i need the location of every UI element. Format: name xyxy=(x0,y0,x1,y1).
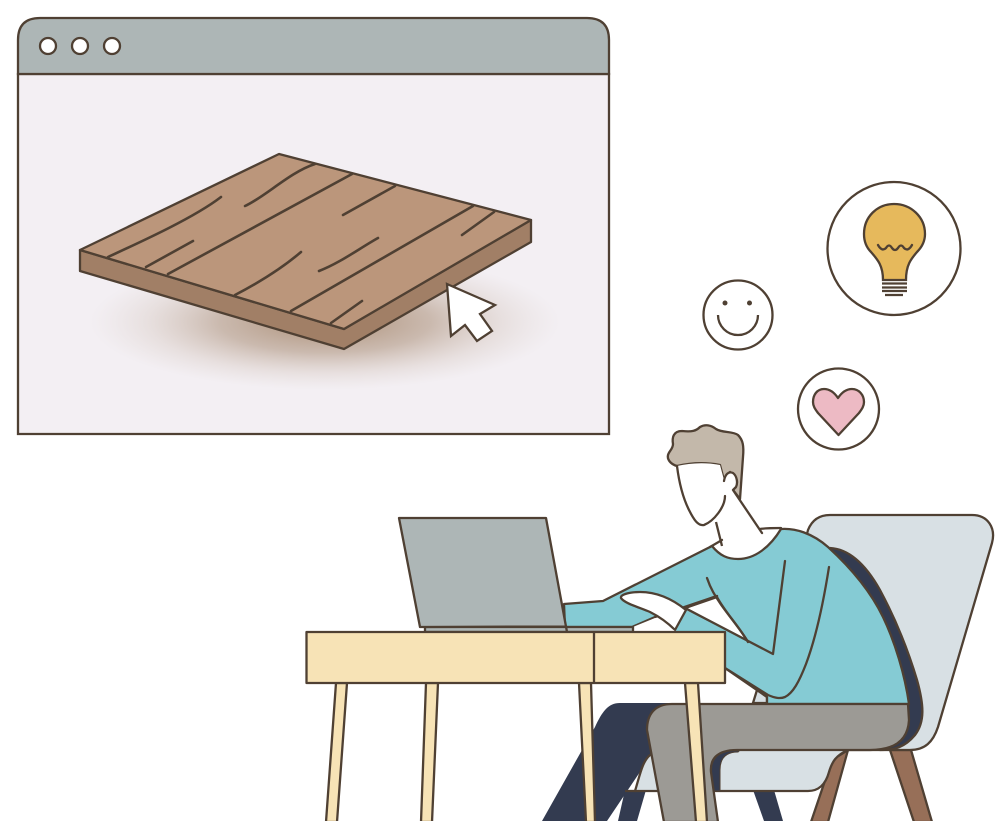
mouth xyxy=(718,315,758,335)
hair xyxy=(668,425,743,499)
chair sliver under elbow xyxy=(753,690,767,703)
window body xyxy=(18,74,609,434)
torso back dark lining xyxy=(830,548,922,750)
desk top xyxy=(306,632,725,683)
heart shape xyxy=(813,389,864,435)
neck front line xyxy=(716,522,722,546)
icon: light bulb xyxy=(828,182,960,315)
hand xyxy=(621,592,686,630)
front forearm xyxy=(676,610,749,669)
pants xyxy=(647,704,909,822)
wood plank xyxy=(80,154,531,349)
bulb base xyxy=(882,284,907,295)
laptop base xyxy=(425,627,633,632)
wood grain lines xyxy=(108,164,494,323)
gap between arms xyxy=(685,597,748,642)
smiley circle xyxy=(704,280,772,350)
laptop screen xyxy=(399,518,567,632)
ear and jaw line xyxy=(724,472,762,533)
cursor arrow xyxy=(447,284,495,341)
bulb circle xyxy=(828,182,960,315)
face outline xyxy=(677,466,725,525)
sweater body and sleeve xyxy=(564,529,909,704)
face xyxy=(678,463,724,480)
desk legs xyxy=(326,683,707,822)
desk rectangle xyxy=(306,632,725,683)
chair front edge tick xyxy=(625,790,636,792)
bulb glass xyxy=(864,204,925,280)
far leg lower parts xyxy=(618,790,783,821)
lower hand gap xyxy=(634,618,675,631)
back leg xyxy=(542,703,668,821)
window control buttons xyxy=(40,38,120,54)
head xyxy=(668,425,762,546)
heart circle xyxy=(798,368,879,450)
chair xyxy=(635,515,993,791)
inner leg shadow xyxy=(710,750,740,791)
plank side faces xyxy=(80,220,531,349)
panel: browser window xyxy=(18,18,609,434)
scene: person at desk xyxy=(306,425,993,822)
eyes xyxy=(722,300,752,306)
desk divider xyxy=(593,632,595,683)
plank top face xyxy=(80,154,531,329)
neck xyxy=(715,490,781,560)
filament xyxy=(878,245,912,250)
chair rear legs xyxy=(811,750,932,822)
sweater detail lines xyxy=(685,528,829,698)
plank shadow xyxy=(118,279,532,382)
window title bar xyxy=(18,18,609,74)
white gap behind arm xyxy=(725,668,767,703)
icon: smiley xyxy=(704,280,772,350)
icon: heart xyxy=(798,368,879,450)
